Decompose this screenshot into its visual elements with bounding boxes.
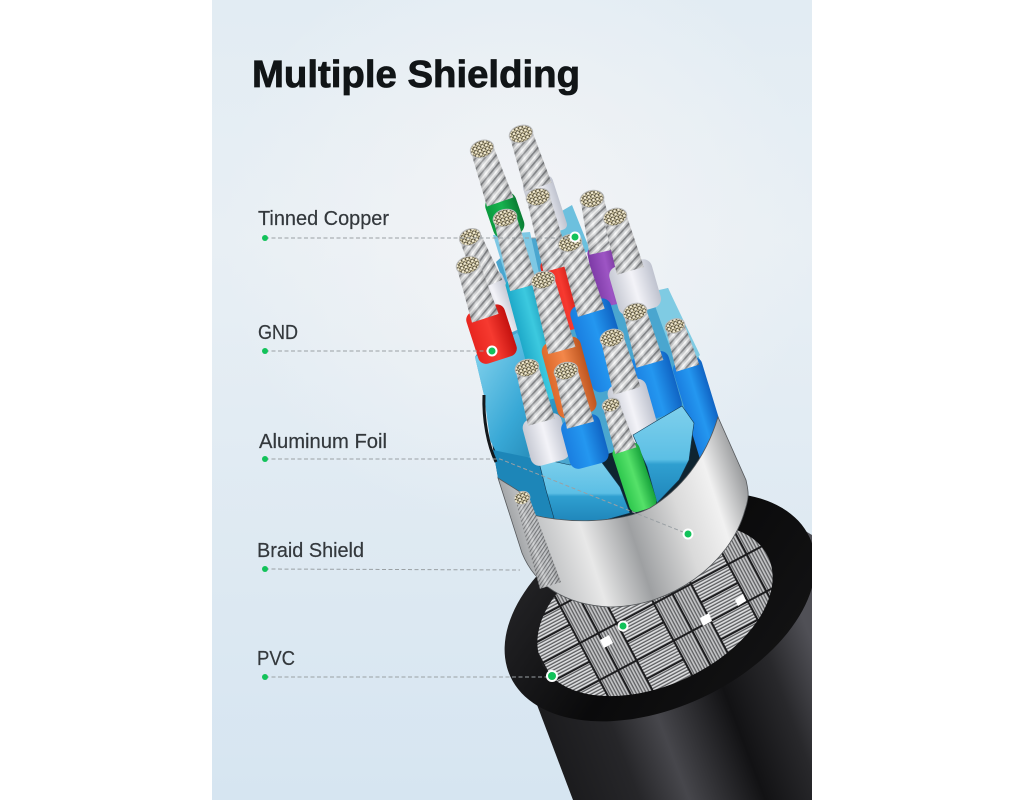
braid shield [537,530,773,696]
wire: purple [580,190,617,306]
callout: Tinned Copper: Tinned Copper [258,208,389,230]
callout: Braid Shield [257,540,628,632]
foil: centre wrap [538,458,630,522]
wire: blue front [554,362,609,469]
wire: white back [508,124,567,230]
aluminum foil sleeve [498,417,748,607]
wire: white centre [600,328,656,444]
foil back mass [475,205,718,520]
callout: Aluminum Foil: Aluminum Foil [259,431,387,453]
wire: blue far right [664,318,720,458]
wire: white front [514,358,568,466]
wire: orange [530,270,596,418]
wire: teal centre [492,208,554,400]
callout: GND [258,322,498,356]
callout: PVC: PVC [257,648,295,670]
foil: right wrap [633,406,694,503]
wire: green back [470,140,524,237]
callout: Tinned Copper [258,208,580,242]
callout: Aluminum Foil [259,431,694,540]
inner cavity [492,434,700,519]
callout: Braid Shield: Braid Shield [257,540,364,562]
wire: grey rear [459,228,518,332]
wire: blue centre [558,234,618,392]
title: Multiple Shielding [252,54,580,96]
callout: GND: GND [258,322,298,344]
wire: blue right [622,302,682,418]
wire: red rear [526,188,576,330]
wire: red front [456,256,517,364]
cable illustration [456,124,812,800]
wire: green front [602,398,656,512]
PVC end face [504,496,812,722]
callout: PVC [257,648,558,682]
PVC jacket body [537,532,812,800]
panel: background [212,0,812,800]
drain wire [514,490,561,589]
wire: white right [602,208,661,314]
